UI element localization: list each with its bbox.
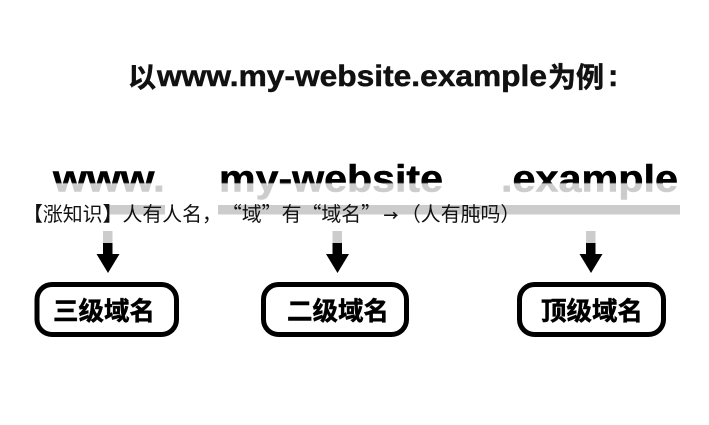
arrow: www to third-level domain bbox=[96, 231, 120, 273]
box: third-level domain bbox=[37, 284, 176, 334]
box: top-level domain bbox=[520, 284, 664, 334]
title: 以 bbox=[128, 62, 156, 93]
box: third-level domain: 三级域名 bbox=[53, 298, 155, 326]
gray bar: www bbox=[108, 205, 165, 214]
arrow: my-website to second-level domain bbox=[326, 231, 349, 273]
gray bar: my-website and example bbox=[218, 205, 680, 214]
arrow: example to top-level domain bbox=[580, 231, 602, 273]
domain part: my-website: my-website bbox=[219, 158, 443, 200]
domain part: www.: www. bbox=[52, 158, 165, 200]
title: : bbox=[608, 58, 618, 93]
trivia caption: → bbox=[383, 205, 398, 226]
title: www.my-website.example bbox=[156, 60, 547, 93]
box: second-level domain bbox=[264, 284, 406, 334]
box: second-level domain: 二级域名 bbox=[287, 298, 389, 326]
title: 为例 bbox=[548, 62, 604, 93]
box: top-level domain: 顶级域名 bbox=[541, 298, 643, 326]
trivia caption: 【涨知识】人有人名，“域”有“域名” （人有肫吗） bbox=[23, 198, 520, 227]
domain part: .example: .example bbox=[501, 158, 678, 200]
